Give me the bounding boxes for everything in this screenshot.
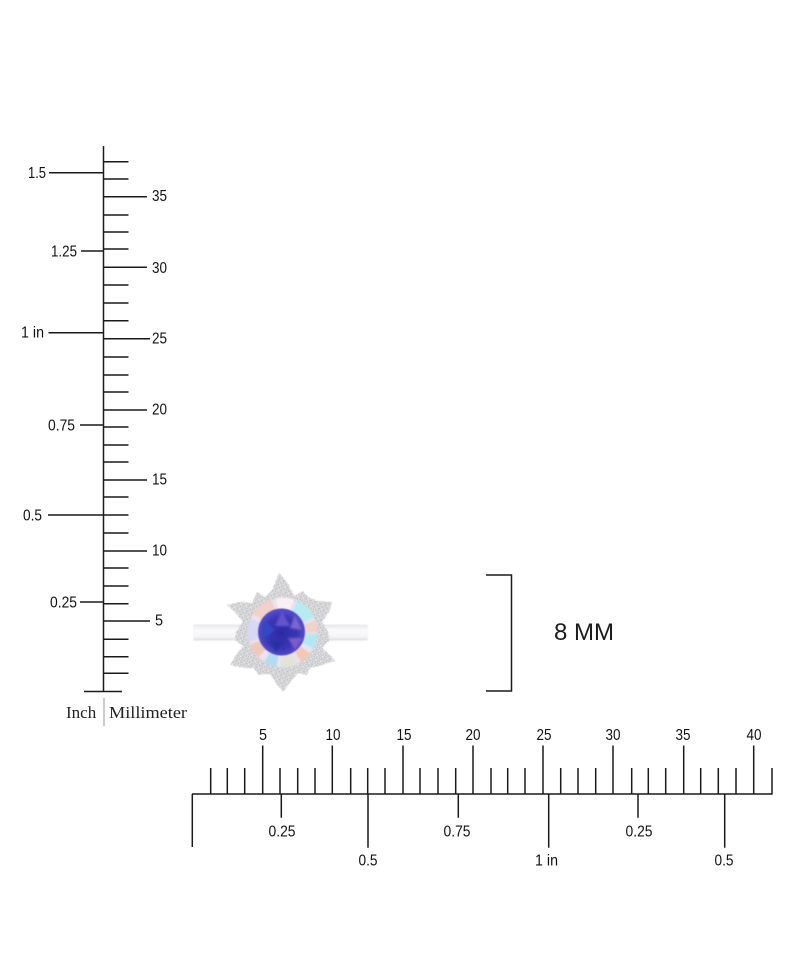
inch labels: 1.5 [28, 165, 46, 182]
size label: 8 MM: 8 MM [554, 619, 614, 646]
millimeter minor ticks [104, 162, 128, 673]
vertical ruler [21, 146, 187, 726]
axis caption: inch and millimeter [66, 698, 187, 726]
millimeter labels: 30 [606, 727, 621, 744]
millimeter labels: 30 [152, 260, 167, 277]
millimeter labels: 10 [326, 727, 341, 744]
millimeter minor ticks [211, 768, 772, 794]
millimeter labels: 5 [155, 612, 163, 629]
millimeter labels: 35 [152, 188, 167, 205]
millimeter labels [152, 188, 167, 629]
ruler base line [84, 690, 122, 692]
millimeter labels: 15 [152, 471, 167, 488]
inch labels: 0.25 [50, 594, 77, 611]
ring band [193, 624, 368, 640]
inch labels: 1 in [21, 324, 44, 341]
millimeter labels: 5 [259, 727, 267, 744]
millimeter major ticks [263, 746, 754, 794]
inch labels: 0.25 [268, 824, 296, 840]
inch labels: 1 in [535, 852, 558, 870]
ruler axis [102, 146, 104, 692]
axis caption: inch and millimeter: Millimeter [109, 703, 187, 722]
axis caption: inch and millimeter: Inch [66, 703, 97, 722]
inch ticks [281, 794, 725, 848]
blue center stone [258, 608, 305, 656]
opal iridescent stone [248, 598, 317, 667]
inch labels: 0.75 [48, 417, 75, 434]
millimeter labels: 25 [536, 727, 552, 744]
millimeter labels: 10 [152, 542, 167, 559]
millimeter labels: 15 [396, 727, 412, 744]
inch labels: 0.75 [444, 824, 471, 840]
inch labels [268, 824, 734, 870]
star halo of small diamonds [227, 573, 335, 692]
millimeter labels: 25 [152, 330, 167, 347]
inch labels: 0.5 [714, 852, 734, 870]
millimeter major ticks [104, 197, 150, 621]
inch ticks [48, 173, 104, 602]
ring photo [193, 573, 368, 692]
inch labels: 0.5 [23, 507, 42, 524]
left end line [191, 794, 193, 847]
millimeter labels: 20 [152, 401, 167, 418]
millimeter labels: 20 [466, 727, 481, 744]
horizontal ruler [192, 727, 772, 870]
inch labels: 0.25 [626, 824, 653, 840]
ruler axis [192, 793, 772, 795]
inch labels [21, 165, 77, 611]
inch labels: 1.25 [51, 243, 77, 260]
millimeter labels: 35 [676, 727, 691, 744]
inch labels: 0.5 [358, 852, 378, 870]
millimeter labels: 40 [746, 727, 762, 744]
millimeter labels [259, 727, 762, 744]
size bracket [486, 575, 512, 691]
